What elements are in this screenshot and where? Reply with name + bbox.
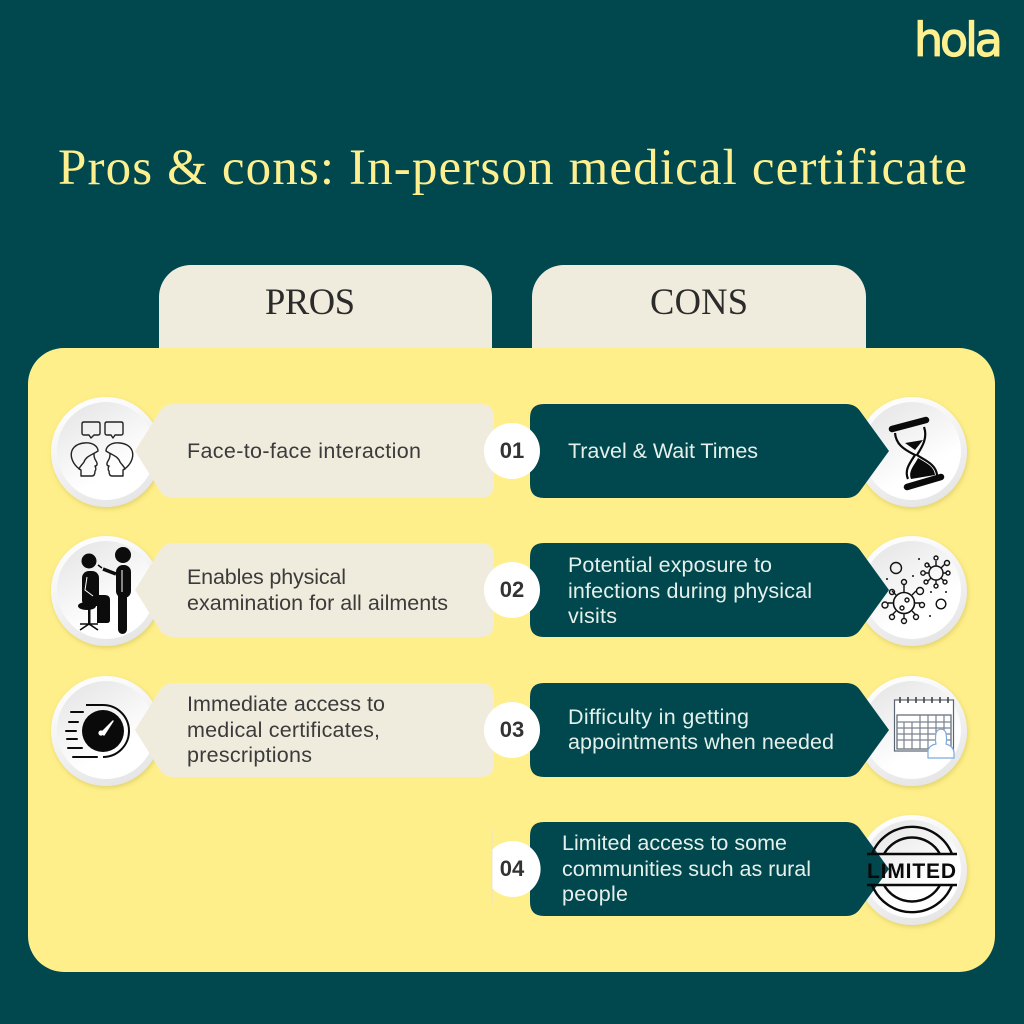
number 03 <box>484 702 540 758</box>
icon: limited stamp: LIMITED <box>867 860 956 883</box>
tab: cons: CONS <box>650 281 748 322</box>
icon: virus <box>882 556 950 624</box>
number 02 <box>484 562 540 618</box>
text: Immediate access to <box>187 692 385 716</box>
icon: face to face <box>71 422 133 476</box>
text <box>562 831 811 906</box>
icon: calendar with doctor <box>894 697 954 758</box>
text: examination for all ailments <box>187 591 448 615</box>
number 04 <box>492 830 541 906</box>
icon: limited stamp <box>867 827 957 912</box>
number 04: 04 <box>500 856 525 881</box>
text: Potential exposure to <box>568 553 772 577</box>
number 01 <box>484 423 540 479</box>
icon: hourglass <box>892 420 941 487</box>
text <box>187 565 448 615</box>
text: infections during physical <box>568 579 812 603</box>
text: Enables physical <box>187 565 346 589</box>
text: Face-to-face interaction <box>187 439 421 463</box>
icon: physical examination <box>78 547 131 634</box>
number 01: 01 <box>500 438 524 463</box>
text: Difficulty in getting <box>568 705 749 729</box>
logo: hola <box>914 13 1003 67</box>
icon: speedometer <box>66 705 129 757</box>
text: Travel & Wait Times <box>568 439 758 463</box>
text: appointments when needed <box>568 730 834 754</box>
tab: cons <box>532 265 866 350</box>
text <box>187 692 385 767</box>
text: prescriptions <box>187 743 312 767</box>
cons row 2 <box>530 536 967 646</box>
text: medical certificates, <box>187 718 380 742</box>
text: people <box>562 882 628 906</box>
panel: main <box>28 348 995 972</box>
pros row 1 <box>51 397 494 507</box>
text: Limited access to some <box>562 831 787 855</box>
title: Pros & cons: In-person medical certificate <box>58 140 967 196</box>
pros row 3 <box>51 676 494 786</box>
text: communities such as rural <box>562 857 811 881</box>
text: visits <box>568 604 617 628</box>
cons row 1 <box>530 397 967 507</box>
text <box>568 705 834 754</box>
tab: pros: PROS <box>265 281 355 322</box>
number 03: 03 <box>500 717 524 742</box>
tab: pros <box>159 265 492 350</box>
cons row 3 <box>530 676 967 786</box>
number 02: 02 <box>500 577 524 602</box>
cons row 4 <box>530 815 967 925</box>
text <box>568 553 812 628</box>
pros row 2 <box>51 536 494 646</box>
